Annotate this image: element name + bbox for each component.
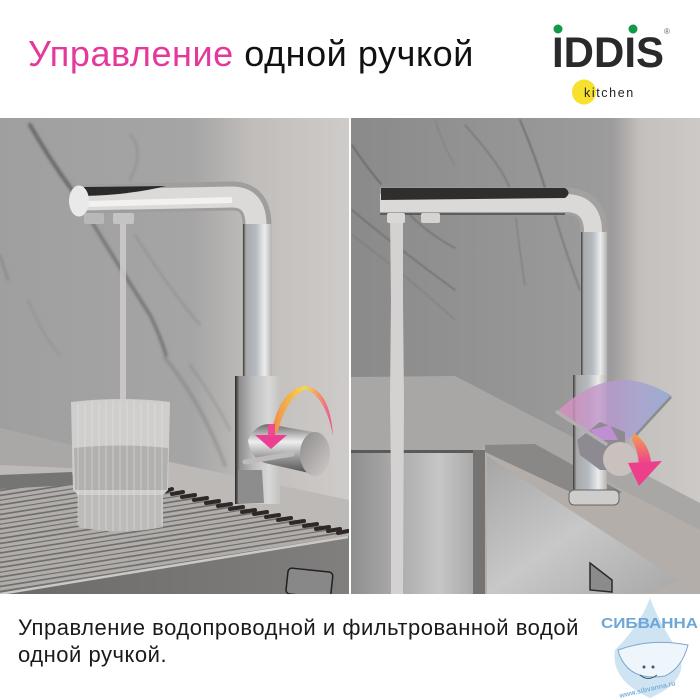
sink left wall	[351, 452, 478, 594]
logo: IDDIS kitchen: kitchen	[584, 86, 635, 100]
spout dark top	[84, 186, 166, 196]
base	[569, 490, 619, 505]
fan: handle range	[558, 380, 672, 446]
sink basin	[0, 536, 349, 594]
spout tube	[380, 201, 594, 380]
marble veins	[0, 125, 230, 465]
aerators	[84, 213, 104, 224]
spout highlight	[85, 200, 232, 204]
spout cap	[69, 186, 89, 216]
spout dark top	[381, 188, 568, 200]
body	[235, 376, 280, 504]
water stream wide	[390, 215, 404, 594]
description text	[18, 615, 579, 667]
watermark: Sibvanna logo: www.sibvanna.ru	[618, 680, 676, 700]
dish rack	[0, 485, 349, 594]
panel: left photo, filtered water	[0, 118, 349, 598]
arrow: down turn	[628, 433, 662, 486]
counter right light area	[482, 446, 700, 594]
countertop stone	[351, 376, 700, 530]
lever	[245, 454, 292, 462]
glass	[71, 399, 170, 532]
watermark: Sibvanna logo	[601, 598, 699, 700]
water stream thin	[120, 220, 126, 412]
description text: Управление водопроводной и фильтрованной водой	[18, 615, 579, 640]
handle cap	[300, 432, 330, 476]
spout tube	[192, 182, 272, 376]
arrow: down turn	[255, 386, 333, 449]
title: Управление одной ручкой	[28, 33, 474, 74]
overflow badge	[590, 563, 612, 592]
description text: одной ручкой.	[18, 642, 167, 667]
pipe shading	[243, 224, 272, 380]
body	[573, 375, 607, 493]
watermark: Sibvanna logo: СИБВАННА	[601, 616, 699, 632]
sink right wall	[487, 456, 678, 594]
logo: IDDIS kitchen	[552, 24, 670, 104]
panel: right photo, tap water	[351, 118, 700, 594]
faucet right	[380, 188, 619, 505]
faucet left	[69, 186, 330, 504]
pipe shading	[581, 232, 607, 380]
logo: IDDIS kitchen: IDDIS	[552, 29, 664, 77]
marble veins	[352, 120, 580, 320]
aerators	[387, 213, 405, 223]
logo: IDDIS kitchen: ®	[664, 27, 670, 36]
overflow badge	[286, 568, 333, 598]
handle	[248, 424, 314, 473]
handle with levers	[557, 397, 671, 476]
counter shadow near sink	[485, 444, 622, 506]
counter behind	[0, 428, 62, 468]
